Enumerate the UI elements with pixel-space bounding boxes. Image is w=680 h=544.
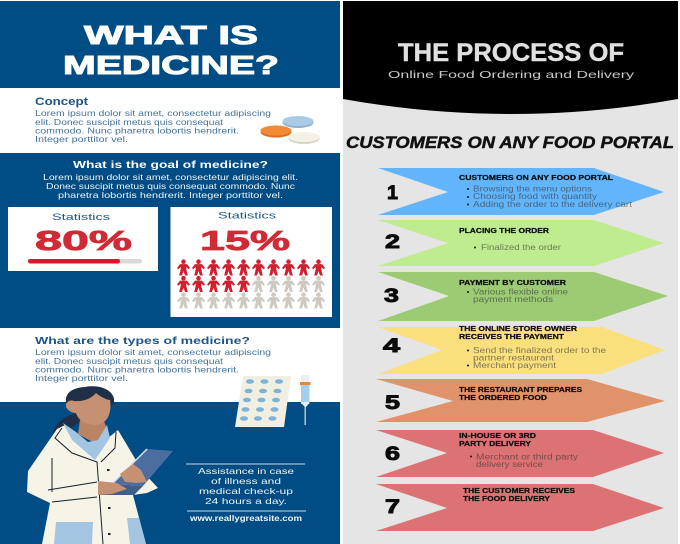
step 3: Various flexible online bbox=[473, 288, 569, 296]
stat card 80%: Statistics bbox=[52, 212, 110, 223]
step 1: Choosing food with quantity bbox=[473, 192, 597, 201]
assistance text: Assistance in case bbox=[198, 466, 294, 476]
concept section: Concept bbox=[35, 96, 88, 108]
title banner: WHAT IS bbox=[84, 20, 258, 50]
face bbox=[66, 393, 110, 425]
concept section bbox=[35, 96, 271, 144]
step 4: Send the finalized order to the bbox=[473, 346, 607, 355]
step 4: 4 bbox=[383, 336, 401, 357]
step 5: THE RESTAURANT PREPARES bbox=[459, 387, 582, 394]
concept section: Integer porttitor vel. bbox=[35, 134, 128, 144]
types section: What are the types of medicine? bbox=[35, 335, 250, 347]
step 5: 5 bbox=[385, 393, 401, 414]
stat card 80%: 80% bbox=[35, 225, 132, 256]
hands bbox=[120, 464, 147, 483]
panel: what is medicine bbox=[0, 0, 340, 544]
step 5 bbox=[376, 379, 665, 422]
step 7 bbox=[376, 484, 664, 531]
types section bbox=[35, 335, 271, 383]
step 4: THE ONLINE STORE OWNER bbox=[459, 326, 577, 333]
step 1: Browsing the menu options bbox=[473, 184, 592, 194]
title banner bbox=[0, 1, 340, 88]
types section: Integer porttitor vel. bbox=[35, 373, 128, 383]
doctor illustration bbox=[27, 386, 173, 544]
step 1: Adding the order to the delivery cart bbox=[473, 200, 633, 209]
types section: elit. Donec suscipit metus quis consequat bbox=[35, 356, 224, 366]
ponytail bbox=[53, 413, 80, 434]
step 7: 7 bbox=[385, 497, 400, 518]
goal text: Donec suscipit metus quis consequat commodo. Nunc bbox=[46, 181, 295, 191]
header banner: Online Food Ordering and Delivery bbox=[388, 69, 635, 81]
step 4: RECEIVES THE PAYMENT bbox=[459, 334, 565, 341]
pockets bbox=[54, 522, 93, 544]
concept section: elit. Donec suscipit metus quis consequat bbox=[35, 117, 224, 127]
header banner bbox=[343, 1, 678, 114]
step 4 bbox=[378, 326, 665, 374]
stat card 15%: 15% bbox=[200, 225, 290, 256]
types section: Lorem ipsum dolor sit amet, consectetur adipiscing bbox=[35, 347, 271, 357]
step 1 bbox=[378, 168, 664, 215]
step 3: PAYMENT BY CUSTOMER bbox=[459, 280, 566, 287]
step 3: 3 bbox=[384, 286, 399, 307]
goal text: pharetra lobortis hendrerit. Integer porttitor vel. bbox=[58, 190, 283, 200]
step 3 bbox=[378, 272, 668, 321]
step 2: PLACING THE ORDER bbox=[459, 228, 549, 235]
panel: food ordering process bbox=[343, 1, 678, 544]
step 6 bbox=[376, 430, 664, 477]
step 2: Finalized the order bbox=[481, 243, 561, 252]
step 2: 2 bbox=[385, 232, 400, 253]
header banner: THE PROCESS OF bbox=[398, 39, 624, 67]
icon: pills bbox=[260, 116, 320, 144]
hair bbox=[66, 386, 114, 414]
assistance text: medical check-up bbox=[199, 486, 293, 496]
goal text: Lorem ipsum dolor sit amet, consectetur adipiscing elit. bbox=[43, 172, 298, 182]
step 6: Merchant or third party bbox=[476, 452, 578, 462]
clipboard bbox=[113, 449, 173, 486]
coat bbox=[27, 425, 158, 544]
goal section bbox=[0, 153, 340, 328]
goal text bbox=[43, 172, 298, 200]
assistance text: 24 hours a day. bbox=[205, 496, 287, 506]
stat card 15% bbox=[170, 207, 332, 317]
neck bbox=[78, 420, 108, 446]
step 4: partner restaurant bbox=[473, 354, 555, 362]
goal heading: What is the goal of medicine? bbox=[73, 159, 268, 171]
assistance text: www.reallygreatsite.com bbox=[189, 514, 302, 523]
step 6: delivery service bbox=[476, 460, 544, 469]
concept section: commodo. Nunc pharetra lobortis hendrerit. bbox=[35, 126, 239, 136]
stat card 80% bbox=[8, 207, 158, 271]
types section: commodo. Nunc pharetra lobortis hendrerit. bbox=[35, 364, 239, 374]
icon: blister pack bbox=[235, 376, 291, 427]
step 5: THE ORDERED FOOD bbox=[459, 395, 547, 402]
icon: syringe bbox=[300, 375, 310, 425]
step 7: THE CUSTOMER RECEIVES bbox=[463, 488, 575, 495]
step 1: CUSTOMERS ON ANY FOOD PORTAL bbox=[459, 175, 614, 182]
step 4: Merchant payment bbox=[473, 361, 557, 370]
step 1: 1 bbox=[387, 183, 398, 204]
step 3: payment methods bbox=[473, 295, 553, 304]
shirt collar bbox=[63, 423, 110, 460]
stat card 15%: Statistics bbox=[218, 210, 276, 222]
concept section: Lorem ipsum dolor sit amet, consectetur adipiscing bbox=[35, 108, 271, 118]
step 6: PARTY DELIVERY bbox=[459, 441, 531, 448]
step 2 bbox=[378, 220, 664, 266]
assistance text bbox=[186, 464, 306, 523]
footer band bbox=[0, 402, 340, 544]
section heading: CUSTOMERS ON ANY FOOD PORTAL bbox=[346, 133, 674, 152]
coat buttons bbox=[107, 469, 110, 535]
coat outline bbox=[48, 428, 147, 544]
assistance text: of illness and bbox=[211, 476, 281, 486]
title banner: MEDICINE? bbox=[63, 50, 279, 80]
step 6: 6 bbox=[385, 444, 400, 465]
step 6: IN-HOUSE OR 3RD bbox=[459, 433, 536, 440]
pictogram chart bbox=[177, 259, 325, 308]
step 7: THE FOOD DELIVERY bbox=[463, 496, 550, 503]
